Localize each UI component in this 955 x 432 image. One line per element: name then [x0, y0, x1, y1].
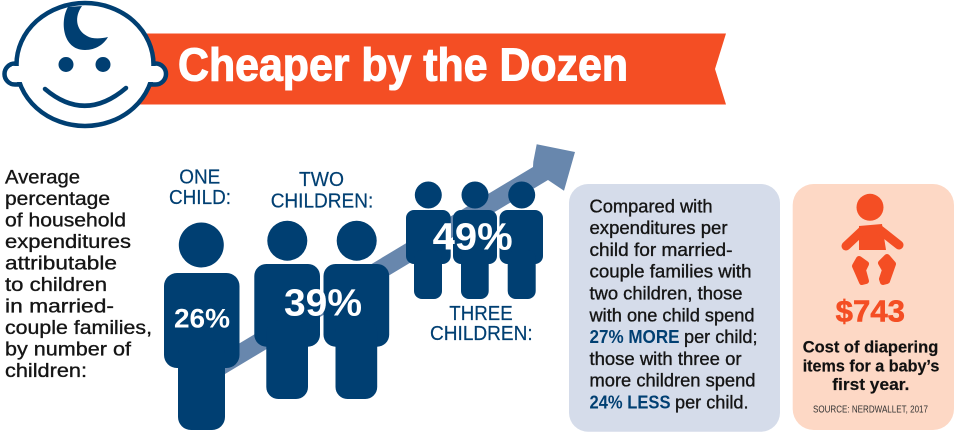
intro text: percentage — [5, 188, 110, 210]
icon: baby face — [4, 3, 166, 126]
arrow — [200, 144, 575, 389]
comparison text: expenditures per — [590, 218, 728, 238]
comparison text: per child. — [675, 392, 748, 412]
label: three children — [430, 303, 533, 345]
value: 26%: 26% — [174, 304, 230, 334]
comparison text: those with three or — [590, 349, 742, 369]
comparison text: two children, those — [590, 284, 742, 304]
label: two children — [271, 169, 373, 212]
intro text: expenditures — [5, 231, 131, 253]
caption — [803, 339, 939, 394]
title: Cheaper by the Dozen — [178, 38, 628, 90]
comparison text: 27% MORE — [590, 327, 680, 347]
label: one child: ONE — [179, 166, 220, 188]
intro text: to children — [5, 274, 107, 296]
intro text: couple families, — [5, 317, 152, 339]
comparison text: child for married- — [590, 240, 732, 260]
label: two children: CHILDREN: — [271, 190, 373, 212]
intro text: of household — [5, 209, 126, 231]
comparison text: couple families with — [590, 262, 752, 282]
comparison text — [588, 196, 758, 412]
comparison text: Compared with — [590, 196, 712, 216]
label: three children: THREE — [449, 303, 513, 325]
intro text: Average — [5, 166, 80, 188]
label: one child: CHILD: — [169, 187, 231, 209]
caption: items for a baby’s — [803, 358, 939, 376]
figure: one child — [164, 222, 240, 430]
intro text: in married- — [5, 295, 114, 317]
comparison text: with one child spend — [588, 305, 754, 325]
comparison text: per child; — [684, 327, 758, 347]
caption: Cost of diapering — [803, 339, 938, 357]
comparison text: 24% LESS — [590, 392, 670, 412]
panel: comparison — [569, 184, 780, 432]
panel: diaper cost — [793, 184, 954, 430]
intro text — [5, 166, 152, 382]
value: 39%: 39% — [284, 283, 362, 325]
label: one child — [169, 166, 231, 209]
comparison text: more children spend — [590, 371, 756, 391]
intro text: attributable — [5, 252, 117, 274]
label: two children: TWO — [299, 169, 344, 191]
source: SOURCE: NERDWALLET, 2017 — [813, 404, 928, 415]
value: 49%: 49% — [433, 216, 513, 258]
figures: three children — [406, 182, 543, 299]
label: three children: CHILDREN: — [430, 323, 533, 345]
intro text: children: — [5, 360, 87, 382]
banner — [140, 34, 726, 104]
caption: first year. — [832, 376, 909, 394]
intro text: by number of — [5, 338, 132, 360]
icon: baby — [846, 194, 899, 282]
figures: two children — [254, 221, 389, 399]
value: $743: $743 — [836, 294, 905, 329]
